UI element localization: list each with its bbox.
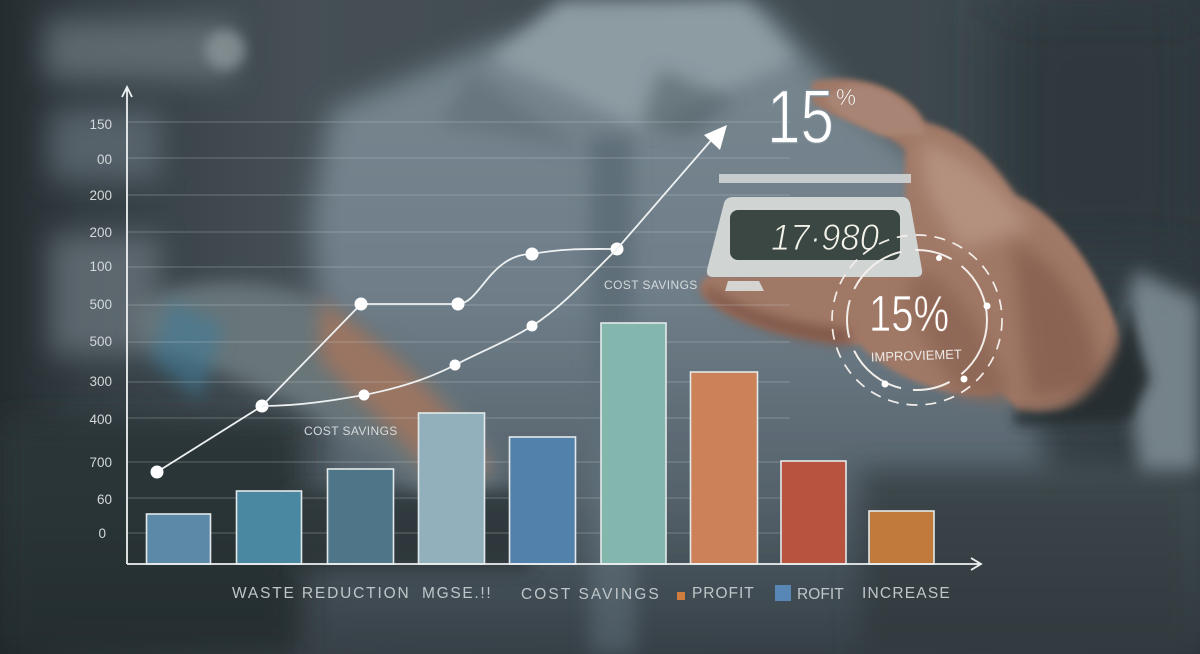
y-axis labels: 300	[89, 374, 112, 389]
scale device	[707, 174, 922, 291]
bar 3	[328, 469, 394, 564]
y-axis labels: 0	[98, 526, 106, 541]
line chart: lower series with arrow	[262, 125, 727, 406]
y-axis labels: 100	[89, 259, 112, 274]
scale body	[707, 197, 922, 277]
y-axis labels: 500	[89, 297, 112, 312]
axes with arrows	[122, 87, 981, 570]
y-axis labels: 150	[89, 117, 112, 132]
x-axis legend: MGSE.!!	[422, 585, 492, 602]
bar 7	[690, 372, 758, 564]
icon: arrow head	[704, 125, 727, 150]
x-axis legend: ROFIT	[797, 586, 845, 603]
y-axis labels: 700	[89, 455, 112, 470]
x-axis legend: INCREASE	[862, 585, 951, 602]
scale screen	[730, 210, 900, 260]
bar 8	[781, 461, 846, 564]
bar 9	[869, 511, 934, 564]
legend swatch: rofit	[775, 585, 791, 601]
bar 4	[418, 413, 484, 564]
bar chart	[146, 323, 934, 564]
dial nodes	[882, 255, 990, 388]
x-axis legend: PROFIT	[692, 585, 755, 602]
hand	[700, 79, 1122, 413]
improvement dial	[832, 235, 1002, 405]
label: cost savings upper: COST SAVINGS	[604, 278, 698, 292]
bar 2	[236, 491, 302, 564]
scale foot	[725, 281, 764, 291]
line chart: upper series	[150, 242, 624, 478]
y-axis labels: 400	[89, 412, 112, 427]
label: cost savings lower: COST SAVINGS	[304, 424, 398, 438]
legend swatch: profit	[677, 592, 685, 600]
bar 1	[146, 514, 210, 564]
grid lines	[128, 122, 790, 533]
bar 5	[510, 437, 576, 564]
y-axis labels: 500	[89, 334, 112, 349]
outer dashed ring	[832, 235, 1002, 405]
bar 6	[601, 323, 666, 564]
headline 15%: %	[836, 84, 856, 110]
y-axis labels: 60	[97, 492, 112, 507]
x-axis legend: WASTE REDUCTION	[232, 585, 410, 602]
scale platform	[719, 174, 911, 183]
x-axis legend	[232, 585, 951, 603]
y-axis labels: 200	[89, 225, 112, 240]
dial value: 15%	[869, 285, 949, 342]
y-axis labels: 00	[97, 152, 112, 167]
x-axis legend: COST SAVINGS	[521, 586, 660, 603]
y-axis labels	[89, 117, 112, 541]
inner dial arcs	[847, 250, 987, 390]
dial caption: IMPROVIEMET	[871, 346, 962, 365]
scale reading: 17·980	[771, 217, 879, 258]
y-axis labels: 200	[89, 188, 112, 203]
headline 15%: 15	[767, 75, 834, 160]
